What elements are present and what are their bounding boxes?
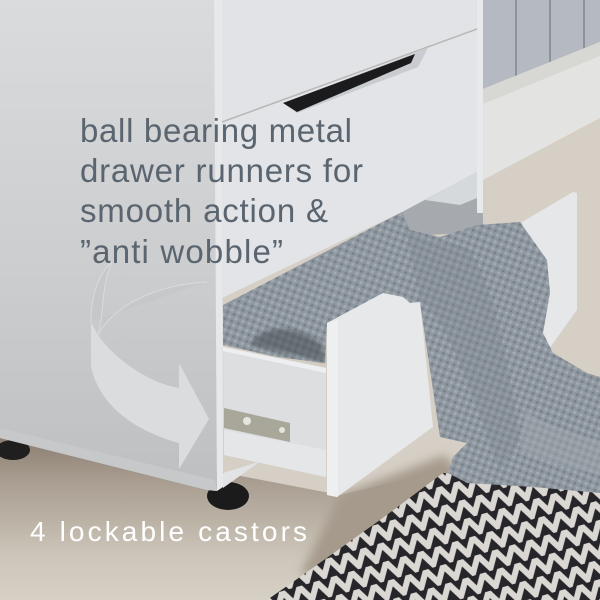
side panel bottom edge [0,428,217,491]
castor: left rear [0,440,30,460]
drawer inner side panel with runner [223,347,326,477]
castor: front [207,482,249,510]
annotation: drawer runners: drawer runners for [80,152,363,189]
annotation: drawer runners [80,112,363,270]
middle drawer front with cut-out handle [222,29,477,298]
annotation: drawer runners: ball bearing metal [80,112,352,149]
cabinet front edge [214,0,223,491]
cabinet plinth under front [223,462,258,488]
annotation: castors: 4 lockable castors [30,516,307,547]
background: wall panelling [483,0,600,89]
annotation: drawer runners: smooth action & [80,192,328,229]
metal runner [224,408,290,442]
curved arrow graphic [91,262,209,469]
top drawer front [222,0,477,121]
cabinet interior gap [402,172,483,236]
cabinet side panel [0,0,217,491]
patterned rug [267,473,600,600]
cabinet right upright [477,0,483,213]
open drawer back side [522,192,577,353]
open drawer front panel [327,293,433,497]
annotation: drawer runners: ”anti wobble” [80,233,283,270]
blanket in drawer [223,212,600,493]
background: skirting board [483,42,600,180]
